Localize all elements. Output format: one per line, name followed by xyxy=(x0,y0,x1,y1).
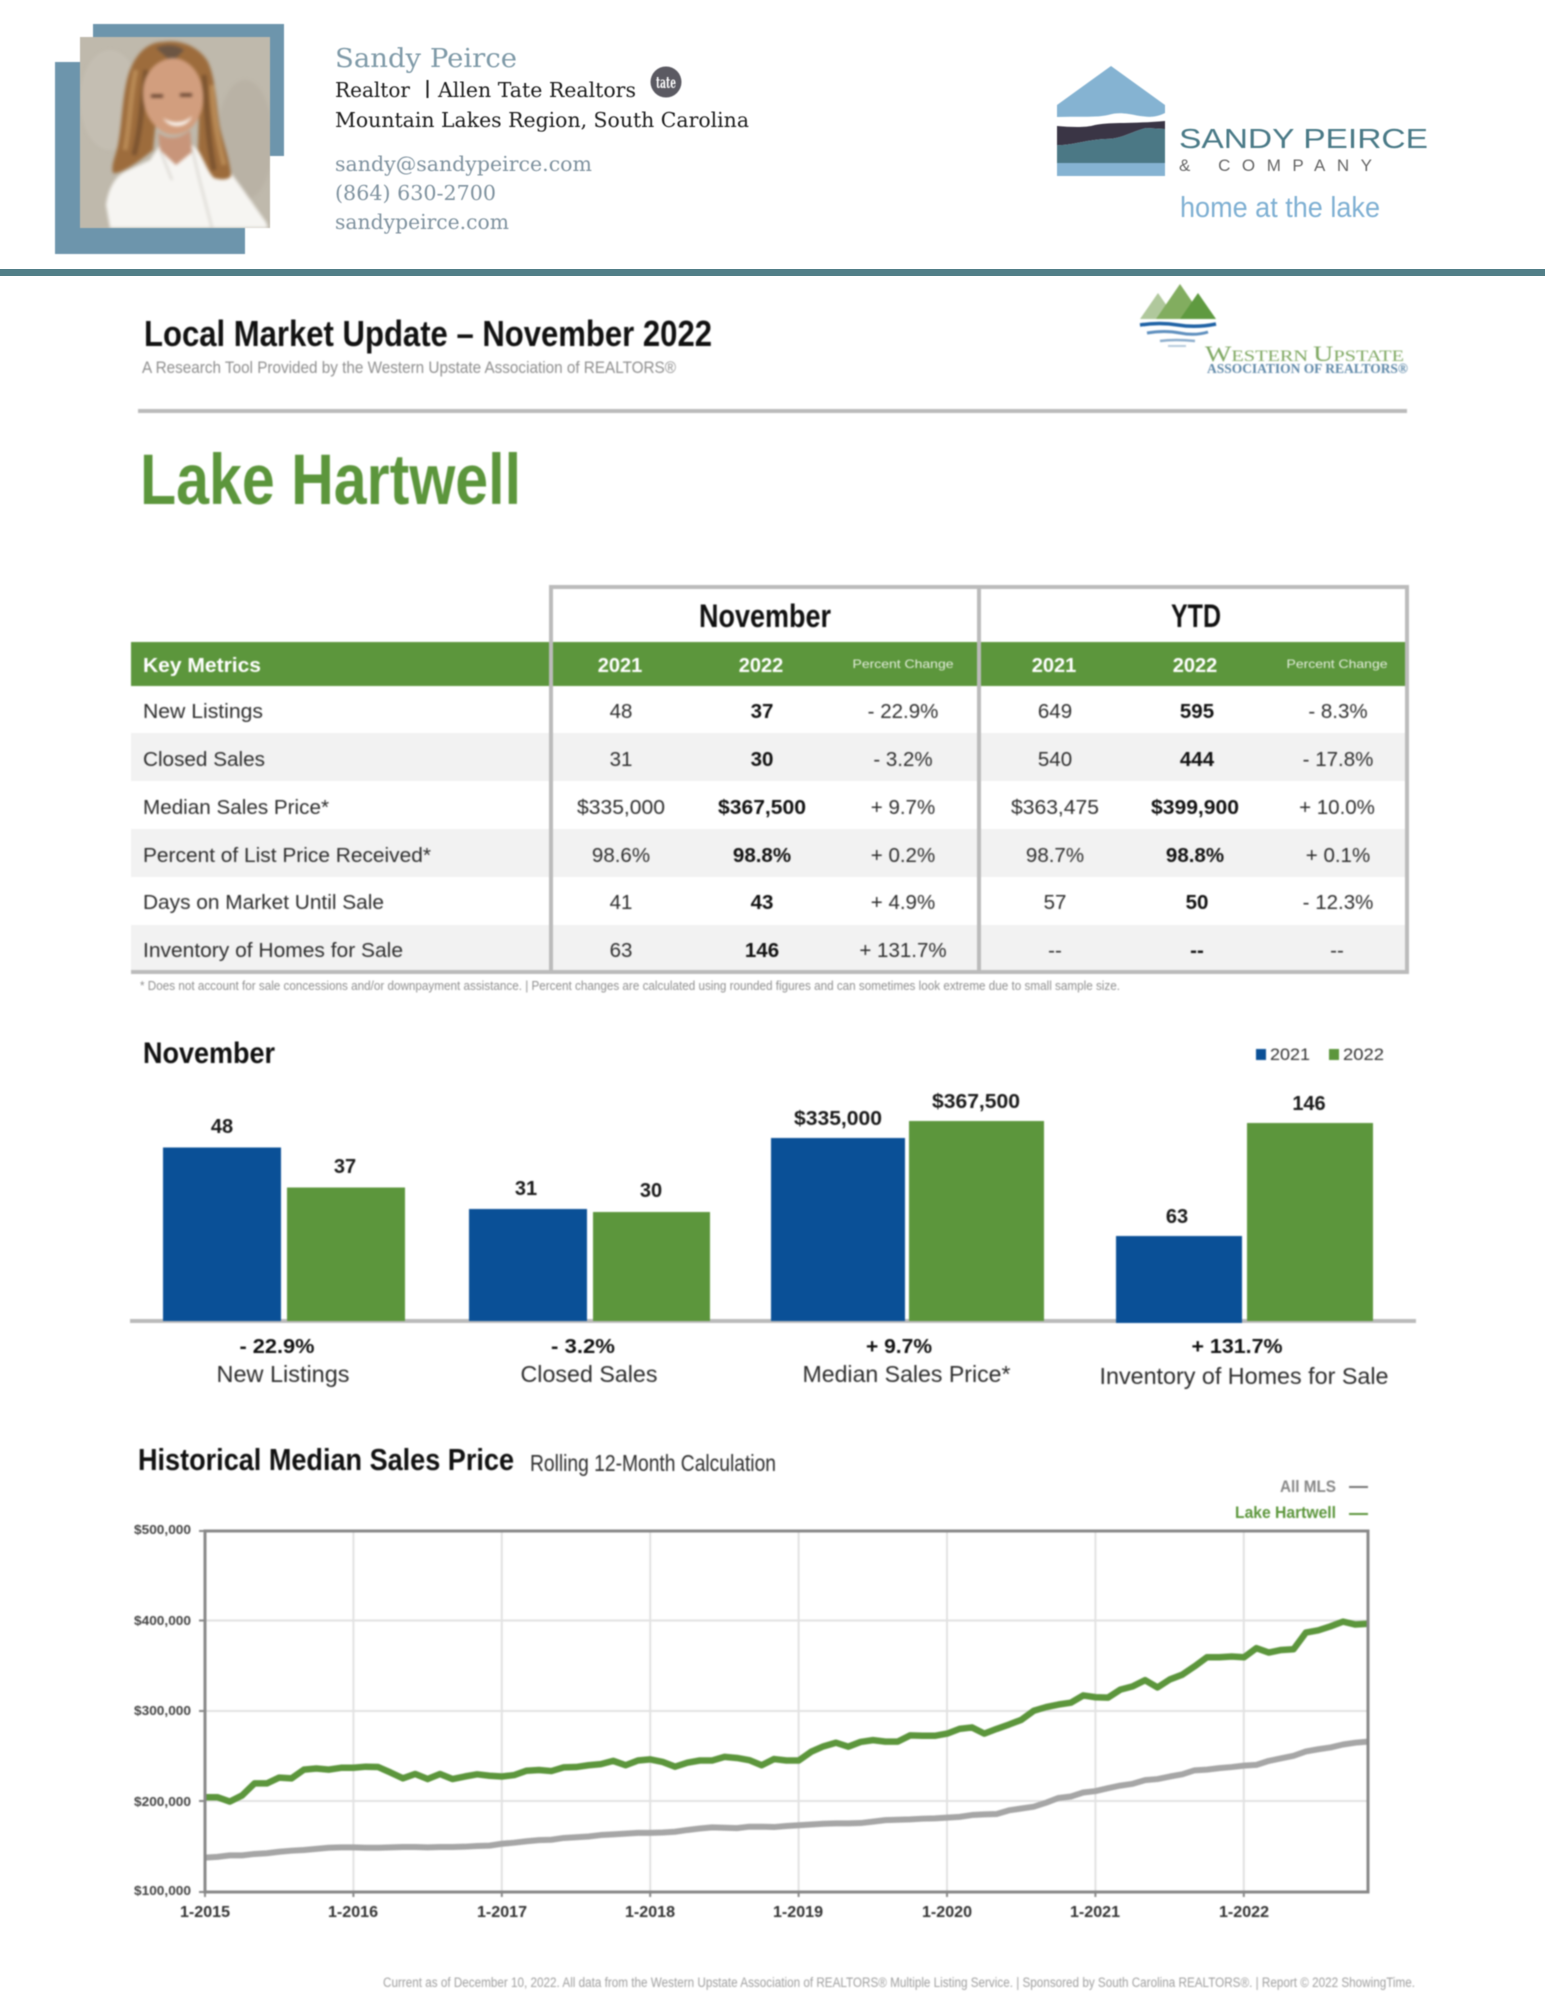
row: new listings xyxy=(143,700,1368,723)
chart legend: 2021 xyxy=(1270,1045,1310,1064)
panel: historical median sales price chart xyxy=(134,1442,1368,1921)
period heading: november: November xyxy=(699,598,831,634)
row: inventory of homes for sale xyxy=(143,939,1344,962)
x axis labels: 1-2015 xyxy=(180,1904,230,1921)
chart subheading: Rolling 12-Month Calculation xyxy=(530,1450,776,1476)
bars: closed sales: 31 xyxy=(515,1178,537,1200)
table frame xyxy=(131,587,1407,972)
category label: median sales price: Median Sales Price* xyxy=(802,1361,1011,1387)
row: median sales price: Median Sales Price* xyxy=(143,797,329,819)
masthead rule xyxy=(138,409,1407,413)
row: closed sales: 30 xyxy=(751,748,773,771)
row: new listings: 649 xyxy=(1038,700,1072,723)
row: median sales price: $367,500 xyxy=(718,796,806,819)
logo: western upstate association xyxy=(1140,284,1409,377)
panel: report masthead xyxy=(138,284,1409,520)
agent website: sandypeirce.com xyxy=(335,210,509,234)
column headers xyxy=(143,655,1388,677)
y axis labels: $100,000 xyxy=(134,1883,191,1898)
column headers: 2021 xyxy=(1032,655,1076,677)
row: new listings: - 22.9% xyxy=(868,700,938,723)
category label: median sales price xyxy=(802,1336,1011,1387)
row: percent of list price received: 98.8% xyxy=(733,844,791,867)
row: inventory of homes for sale: Inventory of Homes for Sale xyxy=(143,940,403,962)
x axis labels xyxy=(180,1904,1269,1921)
panel: key metrics table xyxy=(131,587,1407,993)
agent name: Sandy Peirce xyxy=(335,43,517,74)
bars: new listings: 37 xyxy=(334,1156,356,1178)
category label: inventory of homes for sale xyxy=(1100,1336,1388,1389)
category label: inventory of homes for sale: + 131.7% xyxy=(1192,1336,1283,1358)
footer source note: Current as of December 10, 2022. All data from the Western Upstate Association of REALTORS® Multiple Listing Service. | Sponsored by South Carolina REALTORS®. | Report © 2022 ShowingTime. xyxy=(383,1975,1415,1990)
column headers: Percent Change xyxy=(852,657,954,671)
row: days on market until sale: 43 xyxy=(751,891,773,914)
row: percent of list price received xyxy=(143,844,1370,867)
row: closed sales: - 17.8% xyxy=(1303,748,1373,771)
x axis labels: 1-2017 xyxy=(477,1904,527,1921)
bars: closed sales xyxy=(469,1178,710,1321)
bars: median sales price: $335,000 xyxy=(794,1108,882,1130)
logo: western upstate association: W ESTERN U PSTATE xyxy=(1205,341,1404,366)
column headers: Key Metrics xyxy=(143,655,261,677)
row: median sales price: $399,900 xyxy=(1151,796,1239,819)
row: median sales price: $335,000 xyxy=(577,796,665,819)
table header bar xyxy=(131,642,1407,686)
chart legend xyxy=(1256,1045,1384,1064)
category label: new listings: New Listings xyxy=(216,1361,350,1387)
row: new listings: 595 xyxy=(1180,700,1214,723)
chart baseline xyxy=(130,1319,1416,1323)
y axis labels: $500,000 xyxy=(134,1522,191,1537)
category label: closed sales: - 3.2% xyxy=(551,1336,615,1358)
category label: median sales price: + 9.7% xyxy=(866,1336,932,1358)
row: median sales price xyxy=(143,796,1375,819)
column headers: 2022 xyxy=(739,655,783,677)
category label: new listings xyxy=(216,1336,350,1387)
row: closed sales: 540 xyxy=(1038,748,1072,771)
header divider bar xyxy=(0,269,1545,276)
row: percent of list price received: 98.6% xyxy=(592,844,650,867)
logo text: and company: & COMPANY xyxy=(1179,156,1372,175)
agent phone: (864) 630-2700 xyxy=(335,181,496,205)
x axis labels: 1-2016 xyxy=(328,1904,378,1921)
column headers: 2022 xyxy=(1173,655,1217,677)
row: percent of list price received: 98.8% xyxy=(1166,844,1224,867)
icon: allen tate badge: tate xyxy=(656,73,676,92)
row: new listings: 37 xyxy=(751,700,773,723)
y axis labels: $200,000 xyxy=(134,1794,191,1809)
row: inventory of homes for sale: 63 xyxy=(610,939,632,962)
chart legend: 2022 xyxy=(1343,1045,1384,1064)
photo frame: lower blue block xyxy=(55,62,245,254)
period heading: ytd: YTD xyxy=(1171,598,1221,634)
category label: new listings: - 22.9% xyxy=(240,1336,315,1358)
row: new listings: 48 xyxy=(610,700,632,723)
row: closed sales xyxy=(143,748,1373,771)
table footnote: * Does not account for sale concessions and/or downpayment assistance. | Percent changes are calculated using rounded figures and can sometimes look extreme due to small sample size. xyxy=(140,979,1120,993)
portrait photo xyxy=(80,37,273,228)
row: days on market until sale: 41 xyxy=(610,891,632,914)
y axis labels: $400,000 xyxy=(134,1613,191,1628)
icon: allen tate badge xyxy=(650,66,682,98)
category label: closed sales xyxy=(520,1336,658,1387)
agent title and brokerage xyxy=(335,78,636,102)
bars: new listings xyxy=(163,1116,405,1321)
line legend xyxy=(1235,1477,1368,1522)
row: closed sales: Closed Sales xyxy=(143,749,265,771)
logo tagline: home at the lake xyxy=(1180,192,1380,224)
agent title and brokerage: Allen Tate Realtors xyxy=(437,78,636,102)
row: percent of list price received: + 0.2% xyxy=(871,844,935,867)
x axis labels: 1-2018 xyxy=(625,1904,675,1921)
column headers: 2021 xyxy=(598,655,642,677)
row: inventory of homes for sale: -- xyxy=(1330,939,1344,962)
category label: inventory of homes for sale: Inventory of Homes for Sale xyxy=(1100,1363,1388,1389)
row: days on market until sale: - 12.3% xyxy=(1303,891,1373,914)
row banding xyxy=(131,733,1407,972)
row: median sales price: $363,475 xyxy=(1011,796,1099,819)
category label: closed sales: Closed Sales xyxy=(520,1361,658,1387)
report title: Local Market Update – November 2022 xyxy=(144,313,712,354)
chart gridlines xyxy=(205,1531,1368,1892)
report subtitle: A Research Tool Provided by the Western Upstate Association of REALTORS® xyxy=(142,358,676,377)
row: closed sales: - 3.2% xyxy=(873,748,933,771)
logo: sandy peirce house mark xyxy=(1057,66,1165,176)
line legend: All MLS xyxy=(1280,1477,1336,1496)
bar chart heading: November xyxy=(143,1037,275,1070)
row: percent of list price received: 98.7% xyxy=(1026,844,1084,867)
row: inventory of homes for sale: -- xyxy=(1048,939,1062,962)
line legend: Lake Hartwell xyxy=(1235,1503,1336,1522)
bars: inventory of homes: 146 xyxy=(1292,1093,1326,1115)
row: median sales price: + 9.7% xyxy=(871,796,935,819)
row: closed sales: 444 xyxy=(1180,748,1215,771)
bars: median sales price xyxy=(771,1091,1044,1321)
row: inventory of homes for sale: + 131.7% xyxy=(859,939,947,962)
line: all mls xyxy=(205,1742,1368,1858)
agent title and brokerage: Realtor xyxy=(335,78,410,102)
logo: western upstate association: ASSOCIATION OF REALTORS® xyxy=(1207,362,1409,377)
panel: agent header xyxy=(55,24,1428,254)
row: days on market until sale: 57 xyxy=(1044,891,1066,914)
row: days on market until sale: 50 xyxy=(1186,891,1208,914)
row: new listings: New Listings xyxy=(143,701,263,723)
x axis labels: 1-2021 xyxy=(1070,1904,1120,1921)
bars: median sales price: $367,500 xyxy=(932,1091,1020,1113)
line: lake hartwell xyxy=(205,1622,1368,1802)
plot frame and axis ticks xyxy=(199,1531,1368,1897)
logo text: sandy peirce: SANDY PEIRCE xyxy=(1179,123,1428,154)
row: inventory of homes for sale: 146 xyxy=(745,939,779,962)
bars: new listings: 48 xyxy=(211,1116,233,1138)
row: median sales price: + 10.0% xyxy=(1299,796,1375,819)
x axis labels: 1-2020 xyxy=(922,1904,972,1921)
y axis labels: $300,000 xyxy=(134,1703,191,1718)
row: days on market until sale: Days on Market Until Sale xyxy=(143,892,384,914)
area name heading: Lake Hartwell xyxy=(140,441,521,520)
row: days on market until sale: + 4.9% xyxy=(871,891,935,914)
x axis labels: 1-2022 xyxy=(1219,1904,1269,1921)
y axis labels xyxy=(134,1522,191,1898)
row: new listings: - 8.3% xyxy=(1308,700,1368,723)
bars: closed sales: 30 xyxy=(640,1180,662,1202)
column headers: Percent Change xyxy=(1286,657,1388,671)
photo frame: upper blue block xyxy=(93,24,284,156)
agent region: Mountain Lakes Region, South Carolina xyxy=(335,108,749,132)
row: closed sales: 31 xyxy=(610,748,632,771)
bars: inventory of homes: 63 xyxy=(1166,1206,1188,1228)
row: days on market until sale xyxy=(143,891,1373,914)
bars: inventory of homes xyxy=(1116,1093,1373,1323)
agent email: sandy@sandypeirce.com xyxy=(335,152,592,176)
panel: november bar chart xyxy=(130,1037,1416,1389)
row: percent of list price received: + 0.1% xyxy=(1306,844,1370,867)
chart heading: Historical Median Sales Price xyxy=(138,1442,514,1477)
row: inventory of homes for sale: -- xyxy=(1190,939,1204,962)
row: percent of list price received: Percent of List Price Received* xyxy=(143,845,431,867)
x axis labels: 1-2019 xyxy=(773,1904,823,1921)
